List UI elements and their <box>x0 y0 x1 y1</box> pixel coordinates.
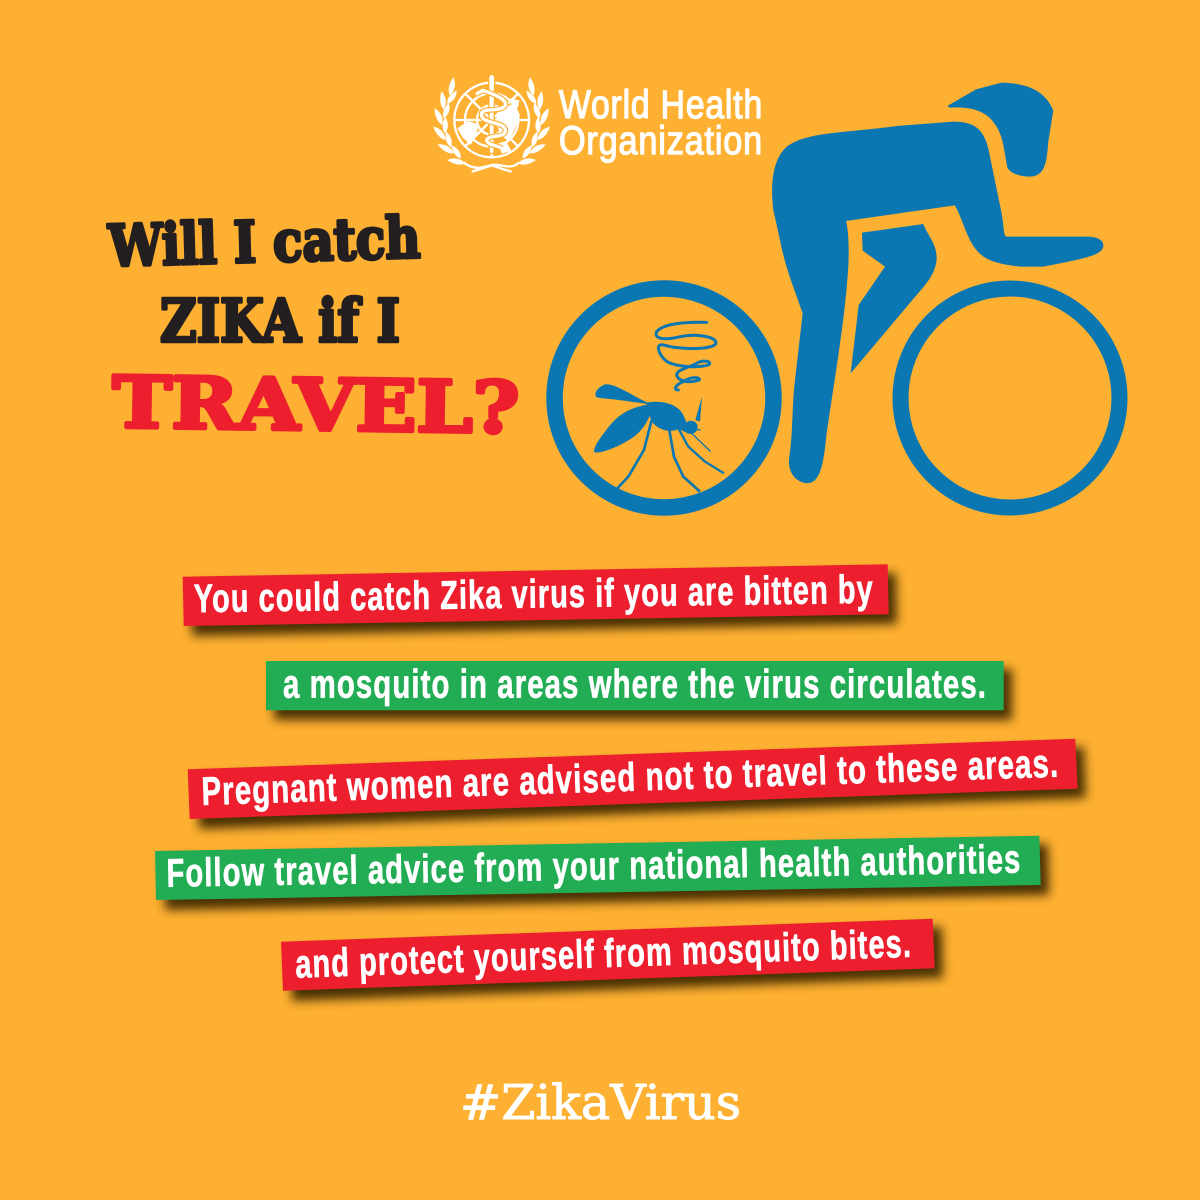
icon: rear wheel <box>554 288 774 508</box>
icon: cyclist figure <box>772 83 1103 483</box>
wordmark: World Health Organization <box>559 83 763 163</box>
WHO logo and wordmark <box>433 74 763 172</box>
title: Will I catch ZIKA if I TRAVEL?: ZIKA if I <box>160 286 400 356</box>
icon: front wheel <box>900 288 1120 508</box>
title: Will I catch ZIKA if I TRAVEL?: TRAVEL? <box>112 360 520 450</box>
icon: cyclist <box>554 83 1120 507</box>
icon: buzzing spiral <box>656 322 716 390</box>
strip: You could catch Zika: You could catch Zika virus if you are bitten by <box>194 568 874 621</box>
hashtag: #ZikaVirus <box>460 1075 741 1131</box>
strip shadows <box>164 573 1086 1001</box>
strip: You could catch Zika <box>183 564 889 626</box>
strip: and protect yourself <box>281 919 935 991</box>
icon: mosquito <box>594 322 724 492</box>
icon: WHO emblem <box>433 74 550 172</box>
wordmark: World Health Organization: Organization <box>559 119 763 163</box>
strip: and protect yourself: and protect yourself from mosquito bites. <box>295 922 913 987</box>
title: Will I catch ZIKA if I TRAVEL? <box>107 204 520 450</box>
title: Will I catch ZIKA if I TRAVEL?: Will I catch <box>107 204 421 280</box>
wordmark: World Health Organization: World Health <box>559 83 763 127</box>
